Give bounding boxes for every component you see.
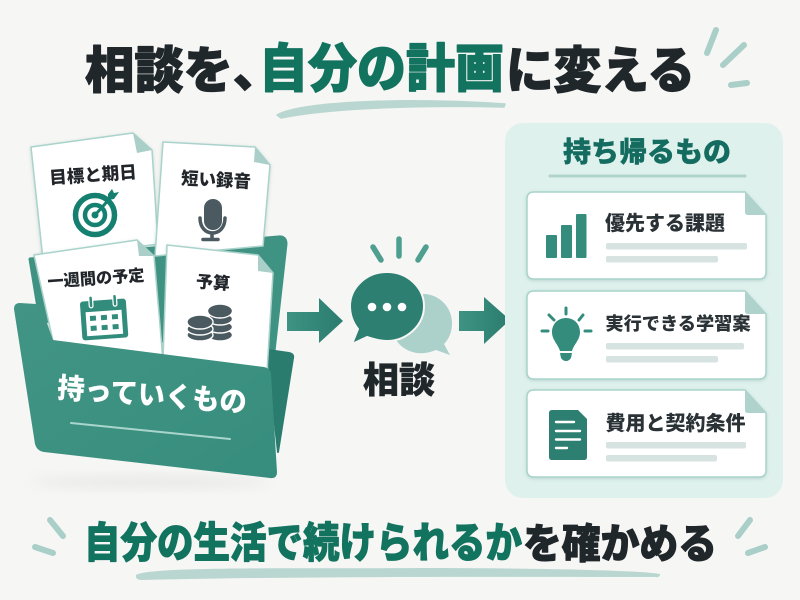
title: comma: 、 <box>233 44 281 98</box>
folder back <box>30 237 286 360</box>
folder label: 持っていくもの <box>56 373 248 419</box>
title: dark ending: に変える <box>506 43 695 99</box>
panel heading: 持ち帰るもの <box>563 136 731 168</box>
card label: 予算 <box>195 271 231 294</box>
message: dark part: を確かめる <box>523 521 717 567</box>
icon: calendar <box>80 295 128 341</box>
panel: what you bring <box>14 133 293 488</box>
icon: target <box>76 189 119 234</box>
card label: 実行できる学習案 <box>605 313 751 334</box>
panel: what you take home <box>505 123 783 498</box>
message accent strokes <box>35 520 765 553</box>
card label: 費用と契約条件 <box>606 411 746 435</box>
placeholder lines <box>606 343 744 362</box>
title: teal emphasis: 自分の計画 <box>259 41 504 99</box>
consultation <box>350 239 452 400</box>
card label: 優先する課題 <box>605 212 725 235</box>
card: priorities <box>527 192 766 279</box>
arrow: consultation to takeaways <box>459 297 510 344</box>
heading underline <box>550 174 745 178</box>
title: dark lead: 相談を <box>85 43 233 99</box>
card label: 短い録音 <box>181 168 251 192</box>
card: weekly schedule <box>34 240 163 360</box>
placeholder lines <box>606 442 746 462</box>
icon: coins <box>187 304 232 341</box>
message: teal part: 自分の生活で続けられるか <box>84 520 522 566</box>
icon: light bulb <box>542 308 591 361</box>
icon: rays <box>373 239 426 260</box>
bottom message <box>84 520 717 580</box>
card: short recording <box>155 142 270 256</box>
card: goals and dates <box>31 133 158 260</box>
icon: microphone <box>200 199 225 240</box>
title underline <box>277 101 505 118</box>
card: budget <box>163 245 273 372</box>
title accent strokes <box>707 30 747 85</box>
icon: bars <box>546 214 586 258</box>
icon: document <box>549 410 587 460</box>
panel background <box>505 123 783 498</box>
card: costs and contract <box>527 390 766 477</box>
folder shadow <box>30 476 270 488</box>
arrow: bring to consultation <box>287 298 343 343</box>
icon: dark speech bubble <box>350 272 424 344</box>
title <box>85 41 695 118</box>
placeholder lines <box>606 243 747 262</box>
folder front <box>14 303 277 478</box>
folder inner flap <box>268 350 293 452</box>
folder label rule <box>71 423 230 439</box>
icon: light speech bubble <box>396 294 452 355</box>
card label: 目標と期日 <box>49 162 137 188</box>
card: action plan <box>527 291 766 379</box>
card label: 一週間の予定 <box>47 267 145 291</box>
label: consultation: 相談 <box>363 360 435 400</box>
message underline <box>136 568 660 580</box>
